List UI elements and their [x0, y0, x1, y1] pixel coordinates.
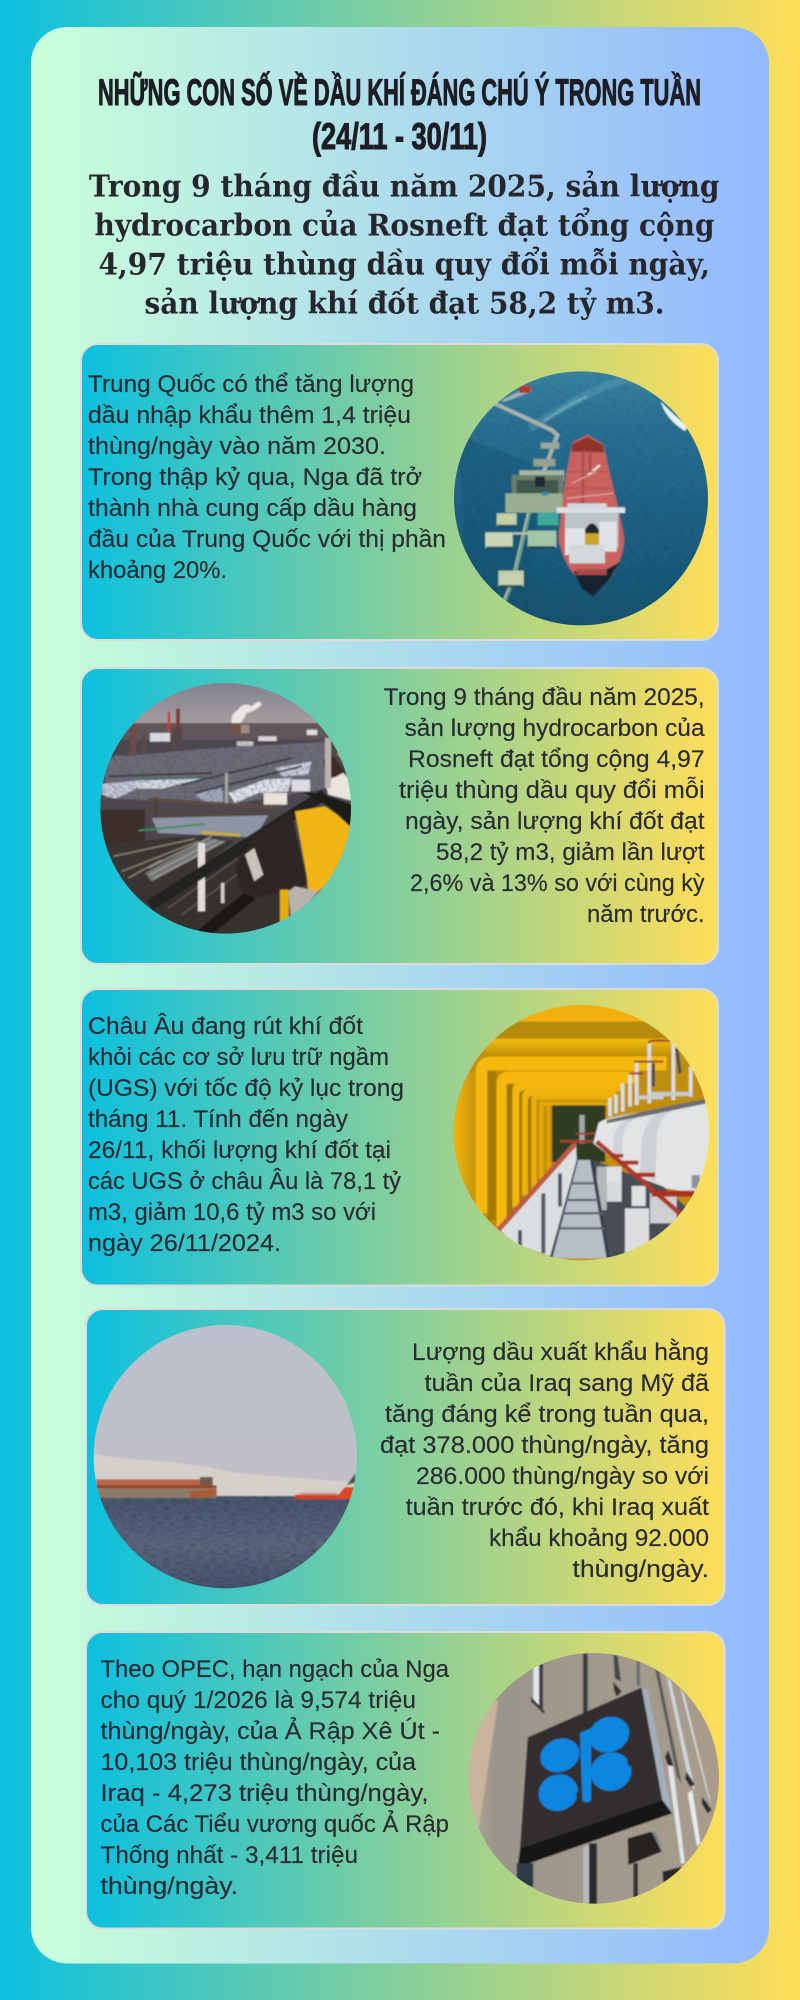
text block: 10,103 triệu thùng/ngày, của [100, 1749, 417, 1776]
panel: Europe gas storage [81, 989, 718, 1286]
photo: barge and tug at sea [90, 1322, 360, 1593]
title: (24/11 - 30/11) [312, 116, 487, 157]
text block: Lượng dầu xuất khẩu hằng [412, 1339, 709, 1366]
card background [81, 989, 718, 1286]
text block: của Các Tiểu vương quốc Ả Rập [100, 1809, 449, 1838]
card background [81, 668, 718, 964]
text block: Theo OPEC, hạn ngạch của Nga [100, 1656, 450, 1683]
photo: OPEC sign on building [465, 1650, 723, 1910]
subtitle: hydrocarbon của Rosneft đạt tổng cộng [94, 206, 715, 244]
text block: tháng 11. Tính đến ngày [88, 1106, 348, 1133]
photo: yellow gas pipes [450, 1000, 717, 1267]
card background [81, 344, 718, 640]
title [98, 71, 701, 157]
text block: 2,6% và 13% so với cùng kỳ [410, 870, 705, 897]
text block: thành nhà cung cấp dầu hàng [88, 495, 417, 522]
text block: Trung Quốc có thể tăng lượng [88, 371, 414, 398]
text block: đạt 378.000 thùng/ngày, tăng [380, 1432, 709, 1459]
photo: refinery and worker [95, 678, 357, 941]
text block: 58,2 tỷ m3, giảm lần lượt [436, 839, 705, 866]
text block: các UGS ở châu Âu là 78,1 tỷ [88, 1168, 401, 1195]
panel: OPEC quotas [86, 1632, 724, 1928]
text block: năm trước. [587, 901, 705, 928]
text block: Iraq - 4,273 triệu thùng/ngày, [100, 1780, 428, 1807]
text block [88, 371, 446, 584]
card background [86, 1632, 724, 1928]
text block: triệu thùng dầu quy đổi mỗi [399, 777, 705, 804]
text block: Trong thập kỷ qua, Nga đã trở [88, 464, 422, 491]
text block: thùng/ngày. [100, 1873, 238, 1900]
text block: tăng đáng kể trong tuần qua, [385, 1401, 709, 1428]
text block: 286.000 thùng/ngày so với [416, 1463, 709, 1490]
panel: Rosneft output [81, 668, 718, 964]
text block: m3, giảm 10,6 tỷ m3 so với [88, 1199, 376, 1226]
text block: ngày 26/11/2024. [88, 1230, 281, 1257]
text block: tuần của Iraq sang Mỹ đã [424, 1370, 710, 1397]
panel: Iraq oil exports [86, 1309, 724, 1605]
text block: Rosneft đạt tổng cộng 4,97 [408, 746, 705, 773]
text block: (UGS) với tốc độ kỷ lục trong [88, 1075, 404, 1102]
panel: China oil imports [81, 344, 718, 640]
text block: sản lượng hydrocarbon của [405, 715, 705, 742]
text block: tuần trước đó, khi Iraq xuất [406, 1494, 709, 1521]
text block: khỏi các cơ sở lưu trữ ngầm [88, 1044, 389, 1071]
text block: thùng/ngày. [572, 1556, 709, 1583]
photo: oil tanker at jetty [450, 365, 715, 630]
text block [100, 1656, 450, 1900]
subtitle: Trong 9 tháng đầu năm 2025, sản lượng [89, 170, 720, 204]
text block [88, 1013, 404, 1257]
subtitle [89, 170, 720, 322]
card background [86, 1309, 724, 1605]
text block: thùng/ngày vào năm 2030. [88, 433, 386, 460]
text block [384, 684, 705, 928]
text block [380, 1339, 710, 1583]
subtitle: 4,97 triệu thùng dầu quy đổi mỗi ngày, [98, 246, 710, 282]
text block: cho quý 1/2026 là 9,574 triệu [100, 1687, 416, 1714]
text block: ngày, sản lượng khí đốt đạt [405, 808, 705, 835]
text block: khẩu khoảng 92.000 [489, 1525, 709, 1552]
text block: khoảng 20%. [88, 557, 227, 584]
subtitle: sản lượng khí đốt đạt 58,2 tỷ m3. [144, 286, 664, 322]
text block: dầu nhập khẩu thêm 1,4 triệu [88, 402, 411, 429]
text block: đầu của Trung Quốc với thị phần [88, 526, 446, 553]
text block: Châu Âu đang rút khí đốt [88, 1013, 363, 1040]
text block: 26/11, khối lượng khí đốt tại [88, 1137, 391, 1164]
text block: Trong 9 tháng đầu năm 2025, [384, 684, 705, 711]
text block: Thống nhất - 3,411 triệu [100, 1842, 358, 1869]
text block: thùng/ngày, của Ả Rập Xê Út - [100, 1716, 440, 1745]
